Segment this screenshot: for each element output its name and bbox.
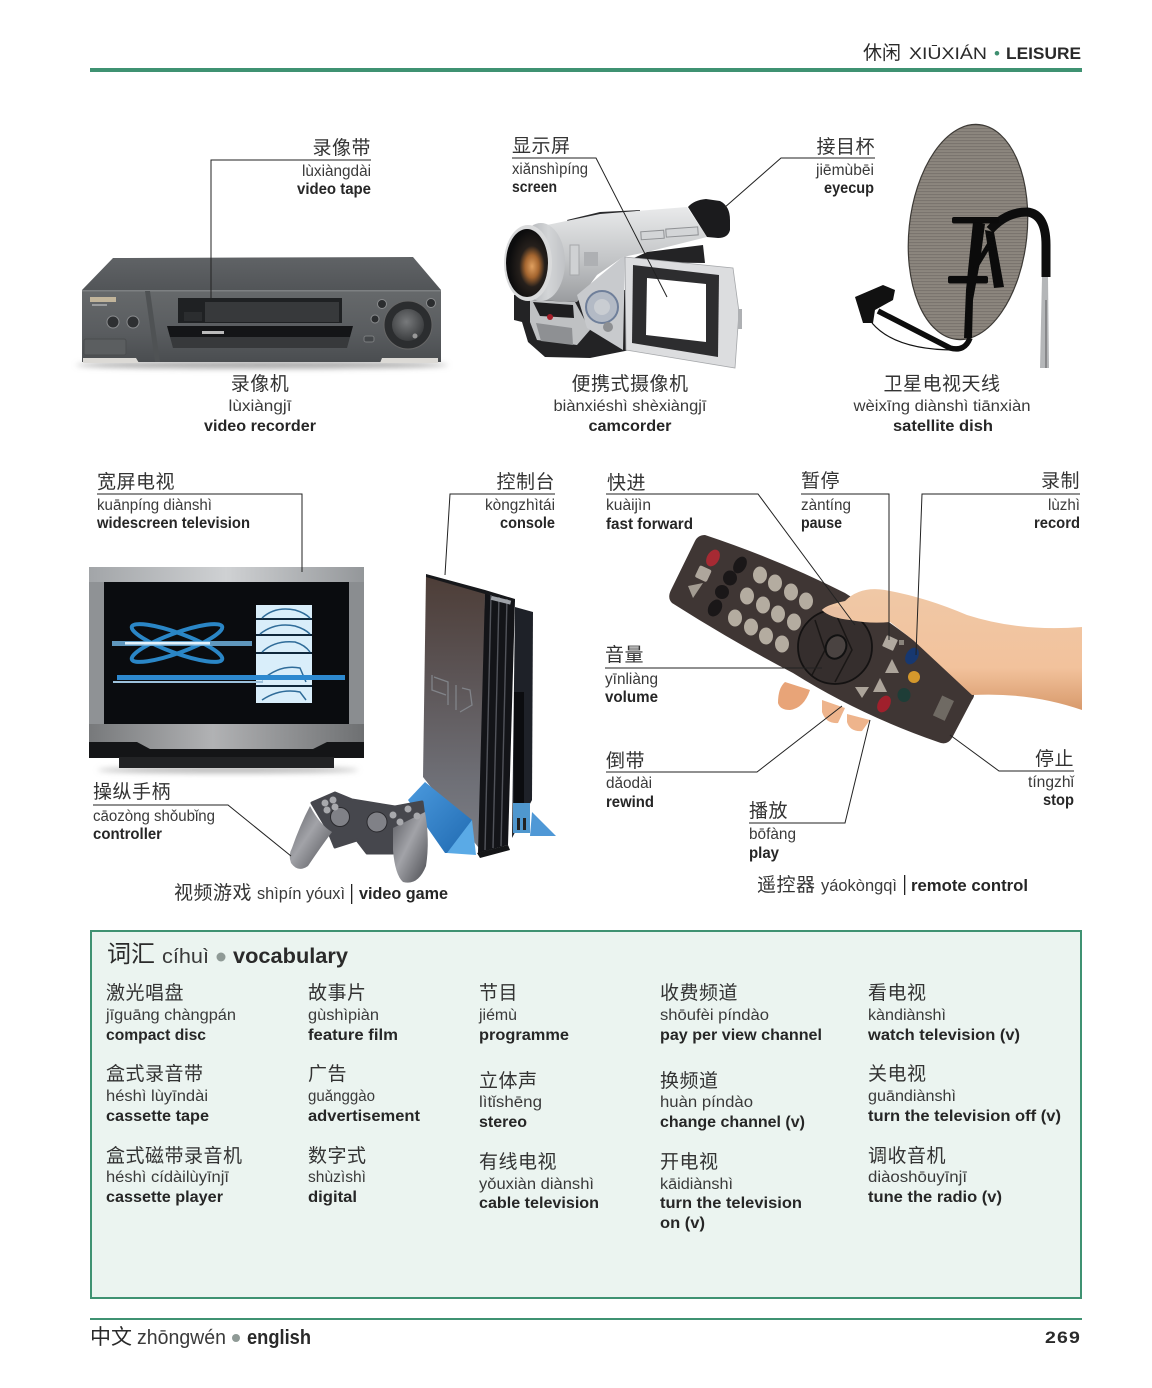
label: play [749,796,796,862]
column 4 terms: 开电视 [660,1147,719,1174]
column 3 terms [478,978,599,1212]
panel: remote control [605,466,1082,897]
column 4 terms: change channel (v) [660,1114,805,1131]
heading: vocabulary [107,934,348,969]
column 4 terms: 收费频道 [660,978,738,1005]
column 2 terms: digital [308,1189,357,1206]
column 1 terms: compact disc [106,1027,206,1044]
label: controller: cāozòng shǒubǐng [93,808,215,825]
label: screen: 显示屏 [512,131,571,158]
column 5 terms: turn the television off (v) [868,1108,1061,1125]
photo: remote control in hand [669,535,1082,743]
photo: controller [290,793,428,883]
column 1 terms: cassette player [106,1189,223,1206]
column 1 terms [105,978,243,1206]
photo: widescreen television [89,567,364,773]
column 2 terms: 数字式 [308,1141,367,1168]
label: stop: tíngzhǐ [1028,774,1076,791]
label: screen: screen [512,179,557,196]
label: controller: controller [93,826,162,843]
label: eyecup [815,132,875,197]
column 5 terms: guāndiànshì [868,1088,956,1105]
leader: volume [605,667,822,669]
caption: video game: 视频游戏 [174,878,252,905]
caption: satellite dish: 卫星电视天线 [883,369,1001,396]
label: play: 播放 [749,796,788,823]
photo: console [408,574,556,858]
label: console: kòngzhìtái [485,497,555,514]
label: console: console [500,515,555,532]
label: widescreen television [96,467,250,532]
page footer [90,1318,1082,1351]
heading: vocabulary: vocabulary [233,945,348,968]
photo: satellite dish [855,118,1049,368]
label: fast forward: fast forward [606,516,693,533]
column 3 terms: 有线电视 [479,1147,557,1174]
caption: video recorder: 录像机 [231,369,289,396]
column 4 terms: turn the television [660,1195,802,1212]
label: record: 录制 [1041,466,1080,493]
column 2 terms: advertisement [308,1108,420,1125]
leader: rewind [606,706,842,772]
caption: camcorder: camcorder [588,418,672,435]
column 4 terms: 换频道 [660,1066,719,1093]
label: controller [93,777,215,843]
label: record [1034,466,1080,532]
column 2 terms: 广告 [308,1059,347,1086]
column 1 terms: 盒式磁带录音机 [106,1141,243,1168]
panel: camcorder [504,131,875,435]
page footer: zhōngwén [137,1327,226,1349]
label: widescreen television: kuānpíng diànshì [97,497,212,514]
caption: remote control: yáokòngqì [821,876,897,895]
label: pause [801,466,851,532]
caption: video game [174,878,448,905]
column 1 terms: héshì lùyīndài [106,1088,208,1105]
column 1 terms: héshì cídàilùyīnjī [106,1169,230,1186]
page header: XIŪXIÁN [909,44,987,63]
column 3 terms: 立体声 [479,1066,538,1093]
label: record: record [1034,515,1080,532]
caption: video recorder: video recorder [204,418,316,435]
panel: satellite dish [852,118,1049,435]
caption: video recorder: lùxiàngjī [228,398,292,415]
page footer: 中文 [90,1321,132,1351]
leader: record [916,494,1080,655]
label: video tape [297,133,371,198]
page header [90,38,1082,72]
column 5 terms: 关电视 [868,1059,927,1086]
photo: video recorder [76,257,448,368]
label: rewind: rewind [606,794,654,811]
label: eyecup: jiēmùbēi [815,162,874,179]
caption: satellite dish: wèixīng diànshì tiānxiàn [852,398,1030,415]
heading: vocabulary: 词汇 [107,934,155,969]
label: video tape: lùxiàngdài [302,163,371,180]
column 5 terms: tune the radio (v) [868,1189,1002,1206]
label: console: 控制台 [496,467,555,494]
caption: remote control: remote control [911,876,1028,895]
column 3 terms: lìtǐshēng [479,1094,542,1111]
label: fast forward: 快进 [607,468,646,495]
label: volume: yīnliàng [605,671,658,688]
leader: widescreen television [97,494,302,572]
label: widescreen television: widescreen television [96,515,250,532]
leader: fast forward [606,494,855,625]
leader: pause [801,494,889,640]
label: controller: 操纵手柄 [93,777,171,804]
column 1 terms: 激光唱盘 [106,978,184,1005]
caption: camcorder: 便携式摄像机 [571,369,689,396]
label: play: bōfàng [749,826,796,843]
column 1 terms: 盒式录音带 [106,1059,204,1086]
label: eyecup: eyecup [824,180,874,197]
column 1 terms: cassette tape [106,1108,209,1125]
column 4 terms: kāidiànshì [660,1176,733,1193]
label: play: play [749,845,779,862]
panel: vocabulary [91,931,1081,1298]
label: volume: volume [605,689,658,706]
column 5 terms: 看电视 [868,978,927,1005]
column 5 terms: diàoshōuyīnjī [868,1169,968,1186]
leader: video tape [211,160,371,300]
label: pause: 暂停 [801,466,840,493]
column 4 terms: shōufèi píndào [660,1007,769,1024]
column 4 terms [660,978,822,1232]
leader: eyecup [724,158,875,208]
leader: console [445,494,555,575]
label: stop: 停止 [1035,744,1074,771]
column 3 terms: cable television [479,1195,599,1212]
label: console [485,467,555,532]
column 2 terms: 故事片 [308,978,367,1005]
label: screen [512,131,588,196]
column 2 terms: feature film [308,1027,398,1044]
column 5 terms: kàndiànshì [868,1007,946,1024]
leader: play [749,720,870,823]
column 2 terms [308,978,420,1206]
label: volume [605,640,658,706]
label: eyecup: 接目杯 [816,132,875,159]
column 2 terms: guǎnggào [308,1088,375,1105]
label: widescreen television: 宽屏电视 [97,467,175,494]
label: pause: zàntíng [801,497,851,514]
panel: video game [89,467,556,905]
page footer: 269 [1045,1328,1081,1347]
label: stop: stop [1043,792,1074,809]
page header: LEISURE [1006,44,1081,63]
label: rewind: dǎodài [606,775,652,792]
leader: stop [950,735,1074,771]
column 5 terms: watch television (v) [867,1027,1020,1044]
column 5 terms: 调收音机 [868,1141,946,1168]
caption: camcorder: biànxiéshì shèxiàngjī [554,398,707,415]
page footer: english [247,1327,311,1349]
page header: 休闲 [863,38,901,65]
caption: remote control [757,870,1028,897]
column 3 terms: programme [479,1027,569,1044]
column 5 terms [867,978,1061,1206]
label: pause: pause [801,515,842,532]
caption: video game: shìpín yóuxì [257,884,345,903]
column 3 terms: yǒuxiàn diànshì [479,1176,594,1193]
column 4 terms: pay per view channel [660,1027,822,1044]
column 1 terms: jīguāng chàngpán [105,1007,236,1024]
panel: video recorder [76,133,448,435]
column 3 terms: jiémù [478,1007,517,1024]
page header: • [994,44,1000,63]
caption: remote control: 遥控器 [757,870,816,897]
caption: satellite dish: satellite dish [893,418,993,435]
caption: video game: video game [359,884,448,903]
label: volume: 音量 [605,640,644,667]
column 2 terms: gùshìpiàn [308,1007,379,1024]
label: screen: xiǎnshìpíng [512,161,588,178]
caption: video recorder [204,369,316,435]
label: record: lùzhì [1048,497,1080,514]
label: stop [1028,744,1076,809]
label: rewind: 倒带 [606,746,645,773]
caption: camcorder [554,369,707,435]
label: fast forward: kuàijìn [606,497,651,514]
column 3 terms: 节目 [479,978,518,1005]
heading: vocabulary: cíhuì [162,946,209,968]
label: rewind [606,746,654,811]
column 3 terms: stereo [479,1114,527,1131]
label: video tape: 录像带 [312,133,371,160]
column 4 terms: on (v) [660,1215,705,1232]
leader: controller [93,805,291,856]
caption: satellite dish [852,369,1030,435]
label: fast forward [606,468,693,533]
leader: screen [512,158,667,297]
label: video tape: video tape [297,181,371,198]
column 2 terms: shùzìshì [308,1169,366,1186]
column 4 terms: huàn píndào [660,1094,753,1111]
photo: camcorder [504,199,742,368]
